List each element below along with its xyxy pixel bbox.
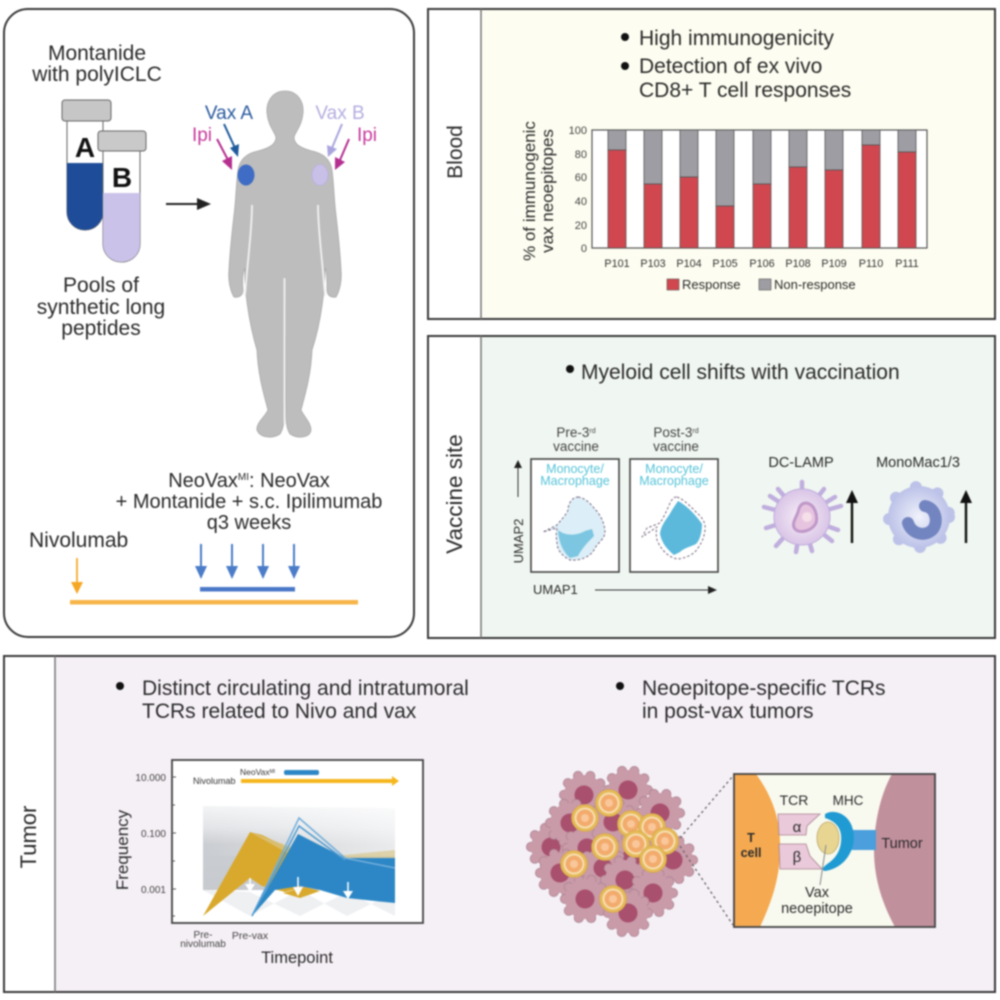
inset labels: neoepitope bbox=[781, 901, 853, 917]
icon: dendritic cell bbox=[764, 482, 841, 552]
text: NeoVax regimen: MI bbox=[238, 472, 249, 483]
bar chart: immunogenic neoepitopes: P106 bbox=[749, 258, 775, 270]
UMAP plot: pre-vaccine: Macrophage bbox=[540, 474, 610, 488]
legend: non-response: Non-response bbox=[774, 277, 856, 292]
illustration: tumor with T cells bbox=[531, 770, 693, 933]
inset labels bbox=[741, 792, 923, 917]
MHC bbox=[823, 812, 876, 871]
icon: human body silhouette bbox=[229, 91, 341, 437]
icon: injection site B bbox=[312, 164, 328, 186]
chart: TCR frequency over time: MI bbox=[270, 769, 275, 775]
bullet text: neoepitope TCRs: Neoepitope-specific TCRs bbox=[642, 677, 886, 700]
text: NeoVax regimen: NeoVax bbox=[168, 470, 330, 492]
bullet text: ex vivo detection bbox=[621, 55, 851, 102]
bar chart: immunogenic neoepitopes: 20 bbox=[575, 220, 587, 232]
text: Montanide with polyICLC: Montanide bbox=[48, 42, 146, 65]
TCR alpha chain bbox=[778, 814, 820, 835]
label: Ipi right: Ipi bbox=[357, 125, 377, 146]
UMAP plot: post-vaccine: Monocyte/ bbox=[645, 462, 703, 476]
inset labels: TCR bbox=[780, 792, 808, 808]
icon: vial B bbox=[98, 131, 146, 262]
label: Vax B: Vax B bbox=[315, 103, 365, 124]
bullet text: ex vivo detection: CD8+ T cell responses bbox=[639, 79, 851, 102]
bar chart: immunogenic neoepitopes: P110 bbox=[859, 258, 883, 270]
panel: treatment schema bbox=[4, 9, 414, 637]
T cell bbox=[734, 774, 780, 927]
inset labels: α bbox=[793, 819, 802, 836]
bar chart: immunogenic neoepitopes: P104 bbox=[676, 258, 702, 270]
text: NeoVax regimen: + Montanide + s.c. Ipilimumab bbox=[116, 491, 382, 513]
label: Vax A: Vax A bbox=[205, 103, 253, 124]
bullet text: myeloid shifts: Myeloid cell shifts with vaccination bbox=[581, 361, 900, 384]
text: pre-3rd vaccine: vaccine bbox=[553, 439, 599, 454]
inset labels: Vax bbox=[805, 885, 830, 901]
UMAP plot: pre-vaccine bbox=[531, 459, 619, 572]
heading: Tumor: Tumor bbox=[16, 806, 41, 868]
panel: vaccine site bbox=[428, 336, 995, 638]
label: Ipi left: Ipi bbox=[192, 125, 212, 146]
arrow: MonoMac up bbox=[960, 490, 972, 543]
chart: TCR frequency over time: Pre-vax bbox=[232, 930, 269, 942]
bar chart: immunogenic neoepitopes: P109 bbox=[821, 258, 847, 270]
chart: TCR frequency over time: 0.001 bbox=[141, 885, 166, 896]
bar: nivolumab period bbox=[70, 600, 358, 604]
arrow: Vax A bbox=[224, 124, 239, 157]
bar chart: immunogenic neoepitopes: P111 bbox=[895, 258, 919, 270]
text: post-3rd vaccine: Post-3 bbox=[653, 425, 699, 440]
chart: TCR frequency over time: NeoVax bbox=[240, 767, 270, 777]
bar chart: immunogenic neoepitopes: P101 bbox=[604, 258, 630, 270]
icon: injection site A bbox=[238, 164, 254, 186]
bar chart: immunogenic neoepitopes: 80 bbox=[575, 149, 587, 161]
axis: UMAP1 bbox=[533, 582, 717, 597]
chart: TCR frequency over time: 10.000 bbox=[135, 773, 166, 784]
axis: UMAP1: UMAP1 bbox=[533, 582, 578, 597]
bar: vaccine period bbox=[200, 587, 295, 592]
text: pools of synthetic long peptides: Pools of bbox=[63, 274, 139, 297]
arrow: Ipi left bbox=[217, 139, 232, 170]
bar chart: immunogenic neoepitopes: 60 bbox=[575, 172, 587, 184]
text: post-3rd vaccine: rd bbox=[692, 428, 699, 435]
bullet text: neoepitope TCRs: in post-vax tumors bbox=[642, 700, 814, 723]
bar chart: immunogenic neoepitopes: P105 bbox=[712, 258, 738, 270]
bullet text: high immunogenicity: High immunogenicity bbox=[639, 27, 834, 50]
arrow: DC-LAMP up bbox=[846, 490, 858, 543]
bar chart: immunogenic neoepitopes: 100 bbox=[569, 125, 587, 137]
inset labels: MHC bbox=[833, 793, 864, 808]
bullet text: neoepitope TCRs bbox=[616, 677, 886, 723]
UMAP plot: pre-vaccine: Monocyte/ bbox=[546, 462, 604, 476]
UMAP plot: post-vaccine bbox=[630, 459, 718, 572]
arrow: Vax B bbox=[327, 124, 342, 157]
bullet text: distinct TCRs: Distinct circulating and intratumoral bbox=[142, 677, 469, 700]
text: pre-3rd vaccine: rd bbox=[589, 428, 596, 435]
bar chart: immunogenic neoepitopes bbox=[520, 121, 927, 270]
bar chart: immunogenic neoepitopes: 40 bbox=[575, 196, 587, 208]
vax neoepitope peptide bbox=[817, 822, 839, 854]
bar chart: immunogenic neoepitopes: % of immunogenic bbox=[520, 121, 539, 261]
text: pools of synthetic long peptides: synthetic long bbox=[37, 296, 165, 319]
chart: TCR frequency over time bbox=[113, 760, 423, 967]
TCR beta chain bbox=[779, 844, 822, 869]
bar chart: immunogenic neoepitopes: P103 bbox=[640, 258, 666, 270]
bar chart: immunogenic neoepitopes: 0 bbox=[581, 243, 587, 255]
text: post-3rd vaccine: vaccine bbox=[653, 439, 699, 454]
text: Montanide with polyICLC: with polyICLC bbox=[31, 63, 162, 86]
bullet text: distinct TCRs: TCRs related to Nivo and vax bbox=[142, 700, 417, 723]
heading: Blood: Blood bbox=[444, 125, 467, 179]
chart: TCR frequency over time: Nivolumab bbox=[193, 776, 236, 786]
inset labels: β bbox=[793, 849, 802, 866]
arrow: nivolumab dose bbox=[71, 558, 83, 594]
icon: monocyte macrophage cell bbox=[888, 486, 950, 548]
bullet text: distinct TCRs bbox=[116, 677, 469, 723]
chart: TCR frequency over time: Pre- bbox=[194, 930, 212, 941]
UMAP plot: post-vaccine: Macrophage bbox=[639, 474, 709, 488]
heading: Vaccine site: Vaccine site bbox=[442, 434, 467, 554]
inset labels: T bbox=[747, 831, 755, 845]
icon: vial A bbox=[62, 100, 111, 230]
text: pools of synthetic long peptides: peptides bbox=[61, 317, 141, 340]
bar chart: immunogenic neoepitopes: P108 bbox=[785, 258, 811, 270]
arrow: vials to patient bbox=[166, 198, 211, 210]
label: MonoMac1/3: MonoMac1/3 bbox=[876, 455, 960, 471]
text: Nivolumab: Nivolumab bbox=[29, 529, 128, 552]
arrow: Ipi right bbox=[335, 139, 349, 170]
axis: UMAP2 bbox=[511, 460, 526, 563]
tumor cell bbox=[874, 774, 935, 927]
text: NeoVax regimen: q3 weeks bbox=[207, 512, 291, 534]
chart: TCR frequency over time: nivolumab bbox=[180, 939, 226, 950]
axis: UMAP2: UMAP2 bbox=[511, 519, 526, 563]
bar chart: immunogenic neoepitopes: vax neoepitopes bbox=[538, 129, 557, 253]
panel: blood bbox=[428, 9, 995, 319]
chart: TCR frequency over time: Frequency bbox=[113, 809, 132, 890]
bullet text: ex vivo detection: Detection of ex vivo bbox=[639, 55, 822, 78]
legend: response: Response bbox=[682, 277, 741, 292]
inset: TCR-MHC interaction bbox=[734, 774, 935, 927]
inset labels: Tumor bbox=[881, 836, 923, 852]
icon: vial A: A bbox=[75, 132, 95, 163]
chart: TCR frequency over time: Timepoint bbox=[261, 949, 333, 967]
text: NeoVax regimen: : NeoVax bbox=[249, 470, 330, 492]
chart: TCR frequency over time: 0.100 bbox=[141, 829, 166, 840]
icon: vial B: B bbox=[112, 162, 132, 193]
panel: tumor bbox=[4, 656, 995, 992]
inset labels: cell bbox=[741, 846, 761, 860]
text: pre-3rd vaccine: Pre-3 bbox=[556, 425, 596, 440]
arrows: vaccine doses bbox=[195, 544, 300, 579]
zoom lines bbox=[680, 776, 733, 925]
label: DC-LAMP: DC-LAMP bbox=[768, 455, 834, 471]
